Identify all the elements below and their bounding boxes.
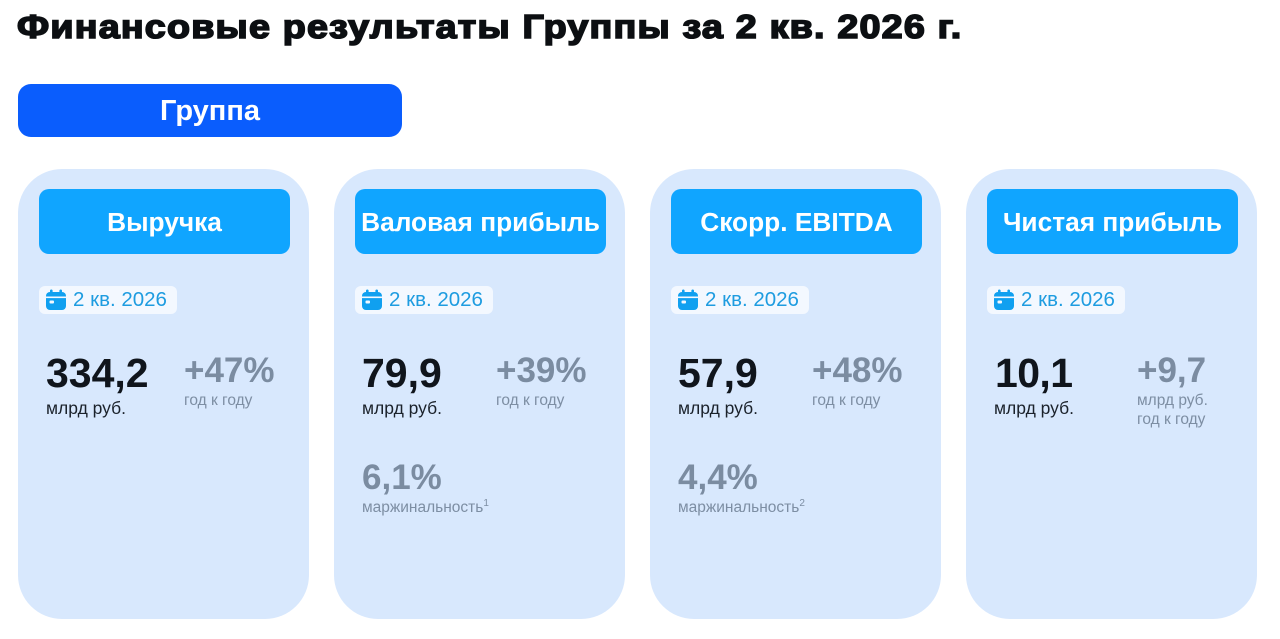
panel: revenue — [18, 169, 309, 619]
date badge: 2 кв. 2026 — [705, 288, 799, 311]
change label — [1137, 392, 1208, 428]
heading: gross profit: Валовая прибыль — [361, 207, 600, 237]
change label: год к году — [496, 392, 564, 409]
year-on-year change: +47% — [184, 351, 274, 390]
year-on-year change: +39% — [496, 351, 586, 390]
date badge — [987, 286, 1125, 314]
date badge — [39, 286, 177, 314]
date badge — [671, 286, 809, 314]
unit: млрд руб. — [678, 398, 758, 418]
date badge: 2 кв. 2026 — [1021, 288, 1115, 311]
date badge: 2 кв. 2026 — [389, 288, 483, 311]
change label: год к году — [1137, 411, 1205, 428]
value: 10,1 — [995, 350, 1072, 396]
heading: net profit: Чистая прибыль — [1003, 207, 1222, 237]
unit: млрд руб. — [994, 398, 1074, 418]
unit: млрд руб. — [362, 398, 442, 418]
value: 57,9 — [678, 350, 758, 396]
date badge: 2 кв. 2026 — [73, 288, 167, 311]
panel: net profit — [966, 169, 1257, 619]
group tab: Группа — [160, 95, 260, 127]
change label: год к году — [812, 392, 880, 409]
heading: revenue — [39, 189, 290, 254]
title: Финансовые результаты Группы за 2 кв. 2026 г. — [17, 8, 962, 45]
value: 79,9 — [362, 350, 442, 396]
change label: год к году — [184, 392, 252, 409]
year-on-year change: +9,7 — [1137, 351, 1206, 390]
margin label: маржинальность1 — [362, 498, 489, 516]
margin value: 4,4% — [678, 458, 758, 497]
value: 334,2 — [46, 350, 149, 396]
date badge — [355, 286, 493, 314]
panel: adjusted EBITDA — [650, 169, 941, 619]
margin label: маржинальность2 — [678, 498, 805, 516]
panel: gross profit — [334, 169, 625, 619]
change label: млрд руб. — [1137, 392, 1208, 409]
group tab — [18, 84, 402, 137]
heading: adjusted EBITDA — [671, 189, 922, 254]
heading: gross profit — [355, 189, 606, 254]
heading: adjusted EBITDA: Скорр. EBITDA — [700, 207, 893, 237]
heading: net profit — [987, 189, 1238, 254]
year-on-year change: +48% — [812, 351, 902, 390]
unit: млрд руб. — [46, 398, 126, 418]
margin value: 6,1% — [362, 458, 442, 497]
heading: revenue: Выручка — [107, 207, 222, 237]
